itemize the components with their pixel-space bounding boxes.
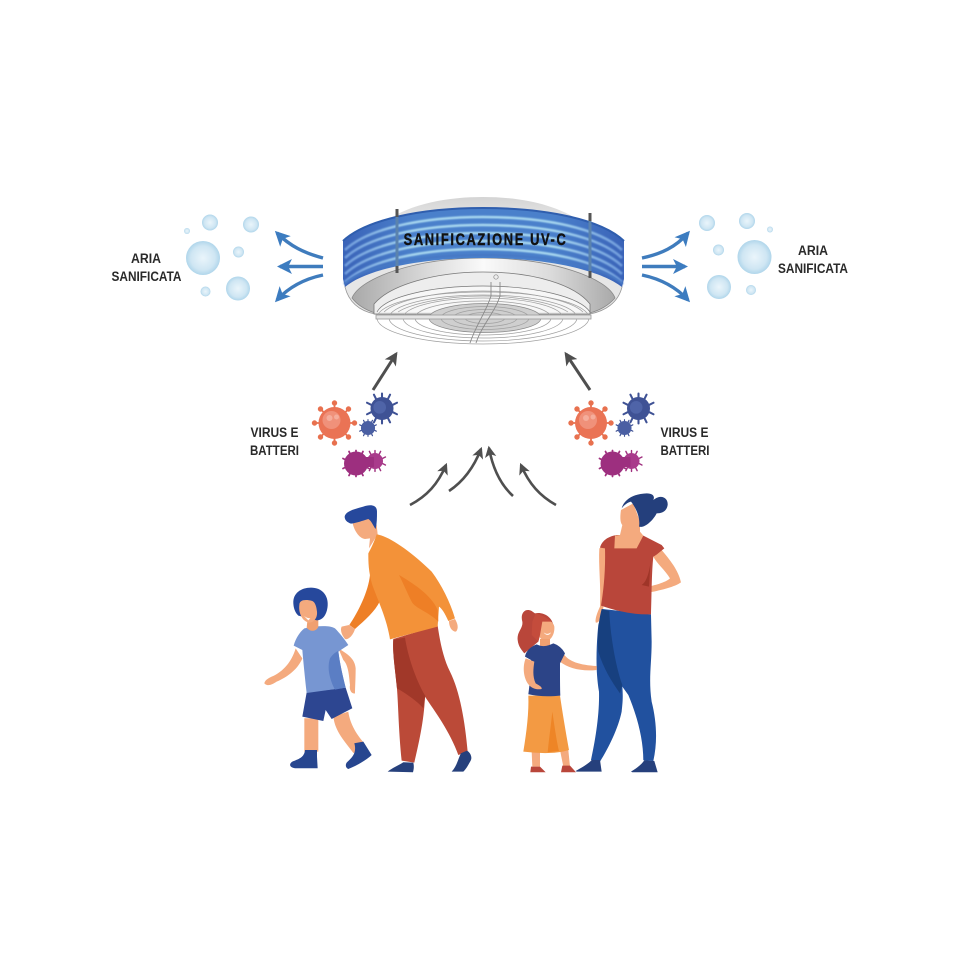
figure: father — [341, 505, 471, 772]
label: virus e batteri right: VIRUS E — [660, 425, 708, 440]
label: virus e batteri left: BATTERI — [250, 443, 299, 458]
fan grille — [376, 275, 591, 344]
bubbles: right clean air — [699, 213, 773, 299]
device dome top — [385, 197, 582, 222]
bubbles: left clean air — [184, 214, 259, 300]
icon: blue virus large — [624, 394, 653, 423]
device: UV-C air sanitizer — [343, 197, 624, 344]
label: virus e batteri right: BATTERI — [660, 443, 710, 458]
arrows: air rising from family — [410, 448, 556, 505]
label: aria sanificata right: SANIFICATA — [778, 261, 848, 276]
label: aria sanificata right: ARIA — [798, 243, 828, 258]
arrows: left blue outflow — [277, 233, 323, 300]
figure: girl — [518, 610, 597, 772]
label: aria sanificata left: ARIA — [131, 251, 161, 266]
icon: purple bacterium — [343, 450, 385, 476]
arrow: air rising to device left — [373, 354, 396, 390]
icon: red virus — [569, 401, 613, 445]
device title: SANIFICAZIONE UV-C — [404, 232, 567, 249]
icon: purple bacterium — [600, 450, 642, 476]
figures: mother and girl — [518, 493, 681, 772]
icon: red virus — [313, 401, 356, 445]
icon: blue virus small — [616, 420, 633, 436]
figures: father and boy — [264, 505, 471, 772]
arrows: right blue outflow — [642, 233, 688, 300]
icon: blue virus small — [360, 420, 376, 436]
figure: mother — [576, 493, 681, 772]
label: aria sanificata left: SANIFICATA — [112, 269, 182, 284]
figure: boy — [264, 588, 372, 769]
blue UV light band — [343, 208, 624, 287]
icon: blue virus large — [367, 394, 397, 423]
viruses and bacteria left — [313, 394, 397, 476]
device lower body — [345, 252, 622, 314]
mounting rods — [396, 209, 592, 278]
label: virus e batteri left: VIRUS E — [250, 425, 298, 440]
viruses and bacteria right — [569, 394, 653, 476]
arrow: air rising to device right — [566, 354, 590, 390]
